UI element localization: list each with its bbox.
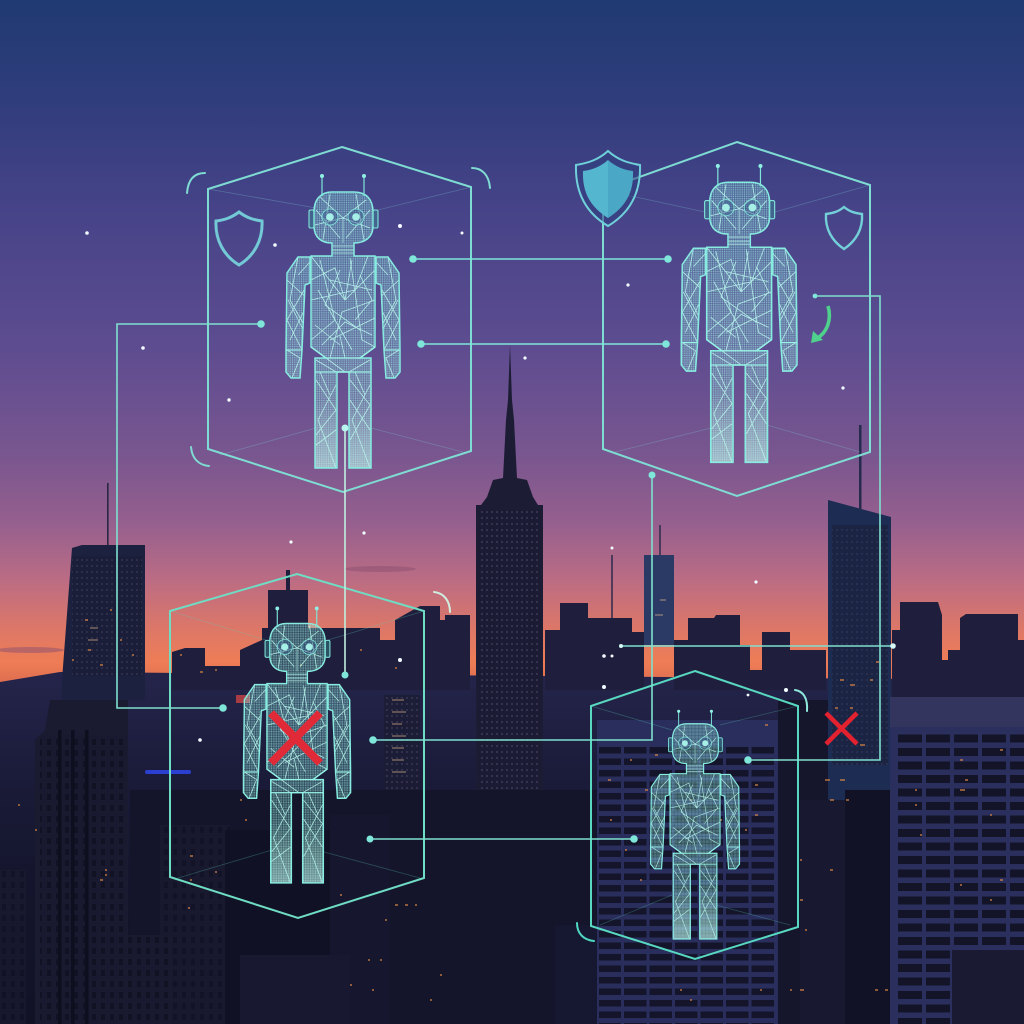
skyline tower antennas [612, 525, 660, 618]
centre foreground blocks [0, 695, 610, 1024]
city skyline [0, 345, 1024, 1024]
icon: red cross on robot 3 [271, 713, 320, 763]
robot 3 [238, 607, 356, 890]
connector: robot 1 to robot 3 left route [117, 320, 265, 712]
city window lights [18, 610, 1003, 1000]
robot 2 [675, 164, 803, 470]
robot 4 [646, 710, 744, 944]
icon: small shield outline top right [826, 207, 862, 249]
hexagon frame: top left [208, 147, 471, 492]
floating data particles [85, 224, 845, 742]
icon: small red cross [826, 713, 857, 744]
blue glass tower [644, 555, 674, 645]
icon: green rotation arrow [811, 306, 829, 343]
connector: robot 2 to robot 4 right route [744, 294, 880, 764]
icon: shield outline top left [216, 212, 262, 265]
connector: robot 3 to robot 2 [369, 472, 656, 744]
sky background [0, 0, 1024, 690]
connector: robot 1 to robot 2 upper [409, 255, 672, 263]
magenta and blue roof lights [145, 695, 250, 774]
icon: filled shield on top right hexagon [576, 151, 640, 226]
connector: robot 1 to robot 3 vertical [342, 424, 348, 678]
empire tower [476, 345, 543, 830]
right glass tower [828, 425, 891, 810]
hexagon frame: top right [603, 142, 870, 496]
connector: robot 3 to robot 4 [366, 835, 638, 843]
connector: robot 1 to robot 2 lower [417, 340, 670, 348]
distant cloud streaks [0, 566, 416, 653]
hexagon frame: bottom left [170, 574, 424, 918]
centre-right window building [597, 700, 890, 1024]
right window building [890, 697, 1024, 1024]
left foreground tower [35, 700, 128, 1024]
left tower [62, 483, 145, 700]
robot 1 [280, 174, 406, 475]
corner brackets [187, 168, 807, 941]
midground silhouettes [172, 570, 470, 690]
far city haze band [0, 672, 1024, 1024]
hexagon frame: bottom right [591, 671, 798, 959]
connector: horizontal over skyline [619, 643, 896, 649]
